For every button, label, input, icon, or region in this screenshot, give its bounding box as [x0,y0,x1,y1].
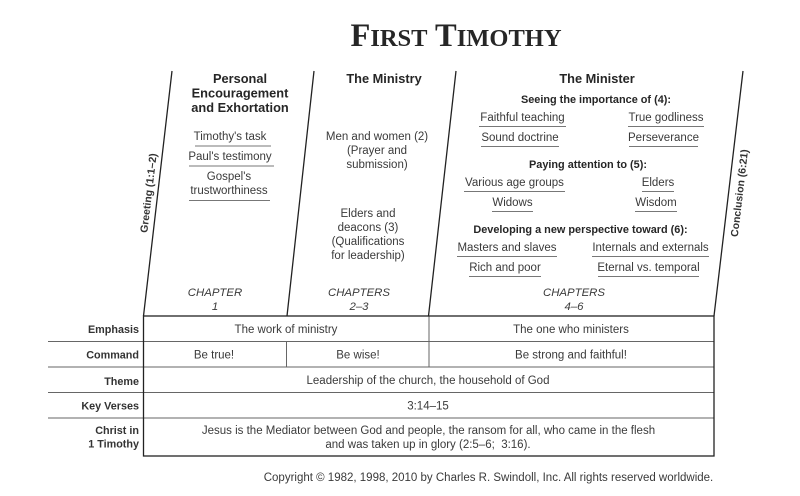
row: emphasis: The one who ministers [513,324,629,336]
chapter label: 1: 1 [212,301,218,313]
group: seeing the importance: Perseverance [628,132,699,144]
list: chapter 1 topics: Gospel's [207,171,251,183]
chapter label: 4-6: CHAPTERS [543,287,605,299]
text: elders and deacons [331,208,405,262]
group: seeing the importance [479,94,704,146]
row: command [86,350,627,362]
summary table [48,316,714,456]
group: developing a new perspective: Eternal vs. temporal [597,262,700,274]
heading: personal encouragement [191,71,289,115]
chapter label: 1 [188,287,242,313]
text: men and women: Men and women (2) [326,131,428,143]
row: key verses: Key Verses [81,400,139,412]
group: seeing the importance: Seeing the importance of (4): [521,94,671,106]
chapter label: 4-6 [543,287,605,313]
chapter label: 1: CHAPTER [188,287,242,299]
group: developing a new perspective [457,224,709,276]
group: paying attention [464,159,677,212]
list: chapter 1 topics [188,131,274,200]
group: developing a new perspective: Rich and poor [469,262,541,274]
group: developing a new perspective: Internals and externals [592,242,709,254]
text: men and women: (Prayer and [347,145,407,157]
chapter label: 2-3 [328,287,390,313]
row: emphasis: The work of ministry [235,324,338,336]
chapter label: 2-3: 2–3 [348,301,369,313]
text: elders and deacons: Elders and [341,208,395,220]
row: christ in 1 timothy: and was taken up in glory (2:5–6; 3:16). [325,439,531,451]
slanted section dividers [144,71,743,316]
row lines [48,316,714,418]
panel: personal encouragement [188,71,289,313]
group: seeing the importance: Sound doctrine [481,132,559,144]
row: christ in 1 timothy [88,425,655,451]
label: greeting: Greeting (1:1–2) [138,153,160,234]
row: christ in 1 timothy: Jesus is the Mediator between God and people, the ransom for all, who came in the flesh [202,425,655,437]
row: emphasis [88,324,629,336]
label: conclusion: Conclusion (6:21) [729,149,751,238]
group: paying attention: Wisdom [635,197,677,209]
group: paying attention: Elders [642,177,675,189]
heading: the minister: The Minister [559,71,635,86]
heading: personal encouragement: Encouragement [192,86,289,100]
group: developing a new perspective: Masters and slaves [457,242,557,254]
heading: personal encouragement: and Exhortation [191,100,289,115]
group: seeing the importance: True godliness [628,112,704,124]
group: developing a new perspective: Developing a new perspective toward (6): [473,224,688,236]
row: key verses: 3:14–15 [407,400,449,412]
copyright: Copyright © 1982, 1998, 2010 by Charles R. Swindoll, Inc. All rights reserved worldwide. [264,472,713,484]
list: chapter 1 topics: Paul's testimony [188,151,272,163]
text: men and women: submission) [346,159,408,171]
row: emphasis: Emphasis [88,324,139,336]
row: christ in 1 timothy: 1 Timothy [88,438,139,450]
title: FIRST TIMOTHY [350,18,562,54]
panel: the minister [457,71,709,313]
list: chapter 1 topics: Timothy's task [194,131,267,143]
row: theme: Theme [104,376,139,388]
text: elders and deacons: (Qualifications [332,236,405,248]
row: command: Be strong and faithful! [515,350,627,362]
row: theme: Leadership of the church, the household of God [307,375,549,387]
table border [144,316,714,456]
group: paying attention: Paying attention to (5): [529,159,647,171]
text: men and women [326,131,428,171]
row: command: Command [86,350,139,362]
chapter label: 4-6: 4–6 [564,301,584,313]
group: paying attention: Widows [492,197,533,209]
row: theme [104,375,549,388]
row: command: Be true! [194,350,234,362]
panel: the ministry [326,71,428,313]
text: elders and deacons: for leadership) [331,250,405,262]
text: elders and deacons: deacons (3) [338,222,399,234]
list: chapter 1 topics: trustworthiness [190,185,268,197]
group: seeing the importance: Faithful teaching [480,112,565,124]
chapter label: 2-3: CHAPTERS [328,287,390,299]
row: command: Be wise! [336,350,380,362]
row: key verses [81,400,449,412]
heading: the ministry: The Ministry [346,71,423,86]
heading: personal encouragement: Personal [213,71,267,86]
row: christ in 1 timothy: Christ in [95,425,139,437]
group: paying attention: Various age groups [465,177,564,189]
